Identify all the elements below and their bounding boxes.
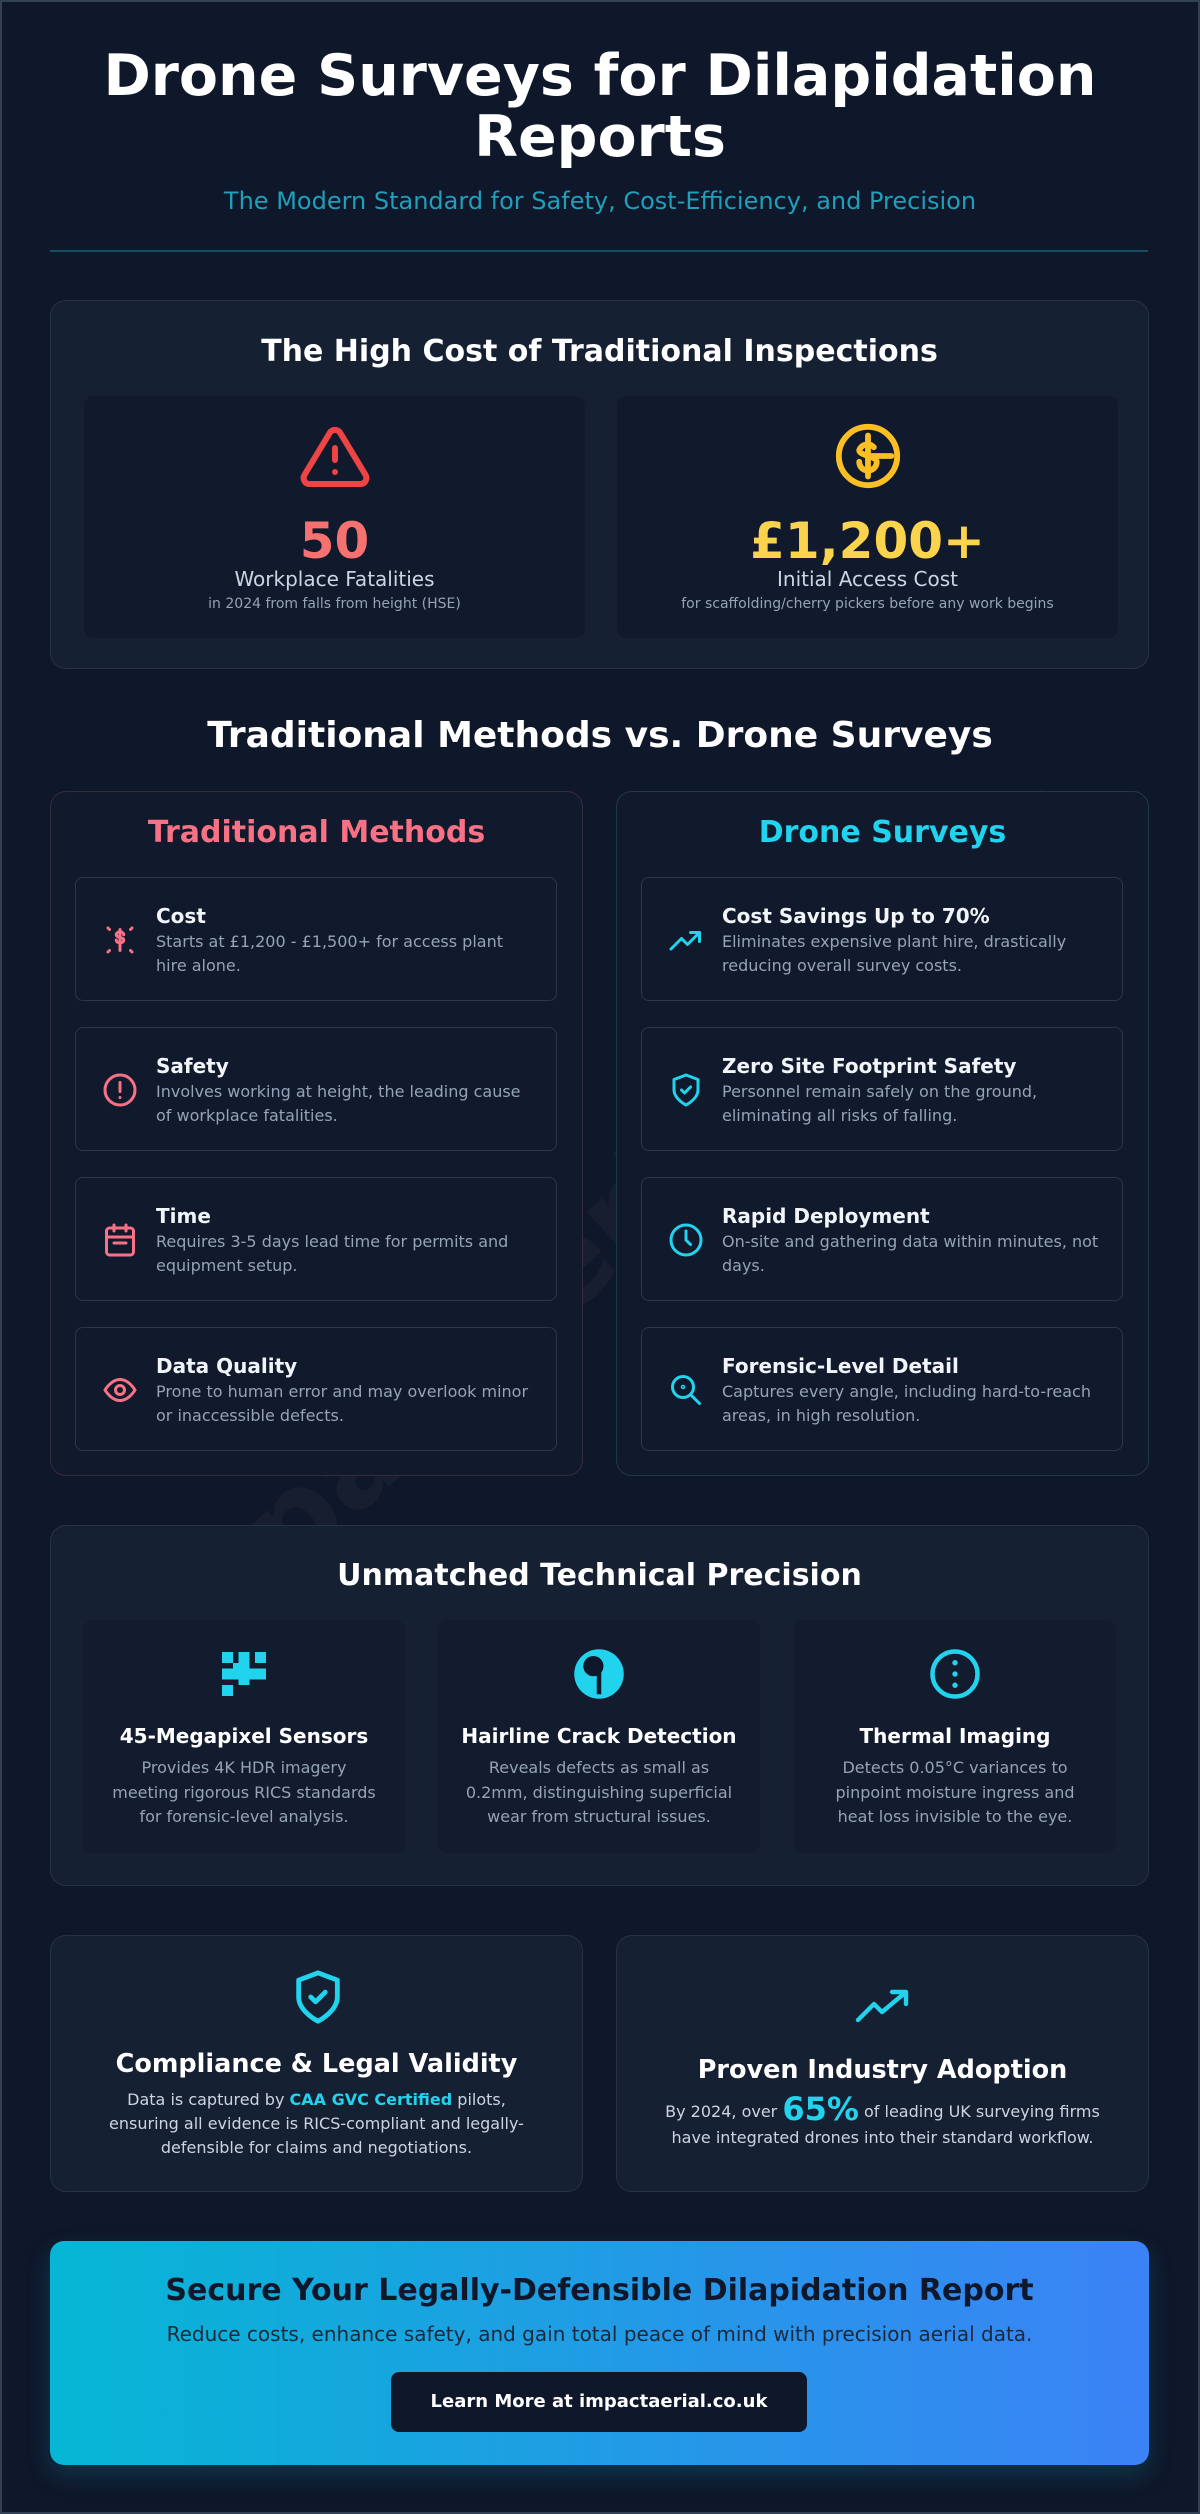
item: forensic detail: Forensic-Level Detail [722,1354,959,1378]
card: crack: Hairline Crack Detection [461,1724,737,1748]
card: thermal [794,1620,1116,1853]
stat: access cost: for scaffolding/cherry pickers before any work begins [681,596,1054,612]
item: cost savings: Cost Savings Up to 70% [722,904,990,928]
item: cost: Cost [156,904,206,928]
item: data quality: Prone to human error and may overlook minor or inaccessible defects. [156,1382,528,1425]
stat: access cost [617,396,1118,638]
card: megapixel: 45-Megapixel Sensors [120,1724,368,1748]
item: time: Time [156,1204,211,1228]
watermark: impactaerial.co.uk [93,755,1106,1714]
title [103,43,1097,170]
icon: shield check [296,1970,340,2024]
card: megapixel: Provides 4K HDR imagery meeting rigorous RICS standards for forensic-level analysis. [112,1758,376,1826]
heading: traditional: Traditional Methods [148,815,485,850]
card: thermal: Thermal Imaging [860,1724,1050,1748]
card: compliance [50,1935,583,2192]
text: adoption: By 2024, over 65% of leading UK surveying firms [665,2090,1100,2128]
item: zero footprint: Zero Site Footprint Safety [722,1054,1016,1078]
stat: access cost: £1,200+ [750,512,985,570]
icon: thermal [930,1649,980,1699]
title: Reports [474,104,726,170]
item: rapid deployment [641,1177,1123,1301]
stat: access cost: Initial Access Cost [777,567,958,591]
stat: fatalities: Workplace Fatalities [234,567,435,591]
icon: warning [300,426,370,487]
icon: pin [574,1649,624,1699]
panel: traditional methods [50,791,583,1476]
heading: cta: Secure Your Legally-Defensible Dilapidation Report [165,2273,1034,2308]
card: thermal: Detects 0.05°C variances to pinpoint moisture ingress and heat loss invisible to the eye. [835,1758,1075,1826]
card: megapixel [83,1620,405,1853]
item: cost savings [641,877,1123,1001]
heading: high cost: The High Cost of Traditional Inspections [261,334,938,369]
item: forensic detail: Captures every angle, including hard-to-reach areas, in high resolution. [722,1382,1091,1425]
title: Drone Surveys for Dilapidation [103,43,1097,109]
item: safety: Involves working at height, the leading cause of workplace fatalities. [156,1082,521,1125]
text: adoption: have integrated drones into their standard workflow. [672,2128,1093,2147]
CTA banner [50,2241,1149,2465]
heading: comparison: Traditional Methods vs. Drone Surveys [207,715,993,756]
item: data quality: Data Quality [156,1354,297,1378]
card: crack: Reveals defects as small as 0.2mm, distinguishing superficial wear from structural issues. [466,1758,732,1826]
item: zero footprint [641,1027,1123,1151]
heading: precision: Unmatched Technical Precision [337,1558,862,1593]
item: cost [75,877,557,1001]
stat: fatalities: 50 [300,512,369,570]
panel: drone surveys [616,791,1149,1476]
item: forensic detail [641,1327,1123,1451]
stat: fatalities [84,396,585,638]
stat: fatalities: in 2024 from falls from height (HSE) [208,596,461,612]
subtitle: The Modern Standard for Safety, Cost-Efficiency, and Precision [224,187,976,215]
item: cost savings: Eliminates expensive plant hire, drastically reducing overall survey costs. [722,932,1066,975]
card: adoption [616,1935,1149,2192]
heading: adoption: Proven Industry Adoption [698,2055,1067,2085]
icon: coin [836,424,900,488]
heading: drone: Drone Surveys [759,815,1006,850]
card: crack [438,1620,760,1853]
text: adoption [665,2090,1100,2147]
button: Learn More at impactaerial.co.uk [431,2391,767,2412]
item: time [75,1177,557,1301]
item: data quality [75,1327,557,1451]
item: rapid deployment: Rapid Deployment [722,1204,930,1228]
text: compliance: Data is captured by CAA GVC Certified pilots, ensuring all evidence is RICS-compliant and legally-defensible for claims and negotiations. [109,2090,524,2157]
icon: trend [856,1990,908,2022]
icon: pixels [222,1652,266,1696]
item: zero footprint: Personnel remain safely on the ground, eliminating all risks of falling. [722,1082,1037,1125]
item: safety: Safety [156,1054,229,1078]
text: cta: Reduce costs, enhance safety, and gain total peace of mind with precision aerial data. [167,2322,1032,2346]
panel: technical precision [50,1525,1149,1886]
button [391,2372,807,2432]
item: cost: Starts at £1,200 - £1,500+ for access plant hire alone. [156,932,503,975]
item: safety [75,1027,557,1151]
item: rapid deployment: On-site and gathering data within minutes, not days. [722,1232,1098,1275]
item: time: Requires 3-5 days lead time for permits and equipment setup. [156,1232,508,1275]
panel: high cost [50,300,1149,669]
heading: compliance: Compliance & Legal Validity [116,2049,517,2079]
